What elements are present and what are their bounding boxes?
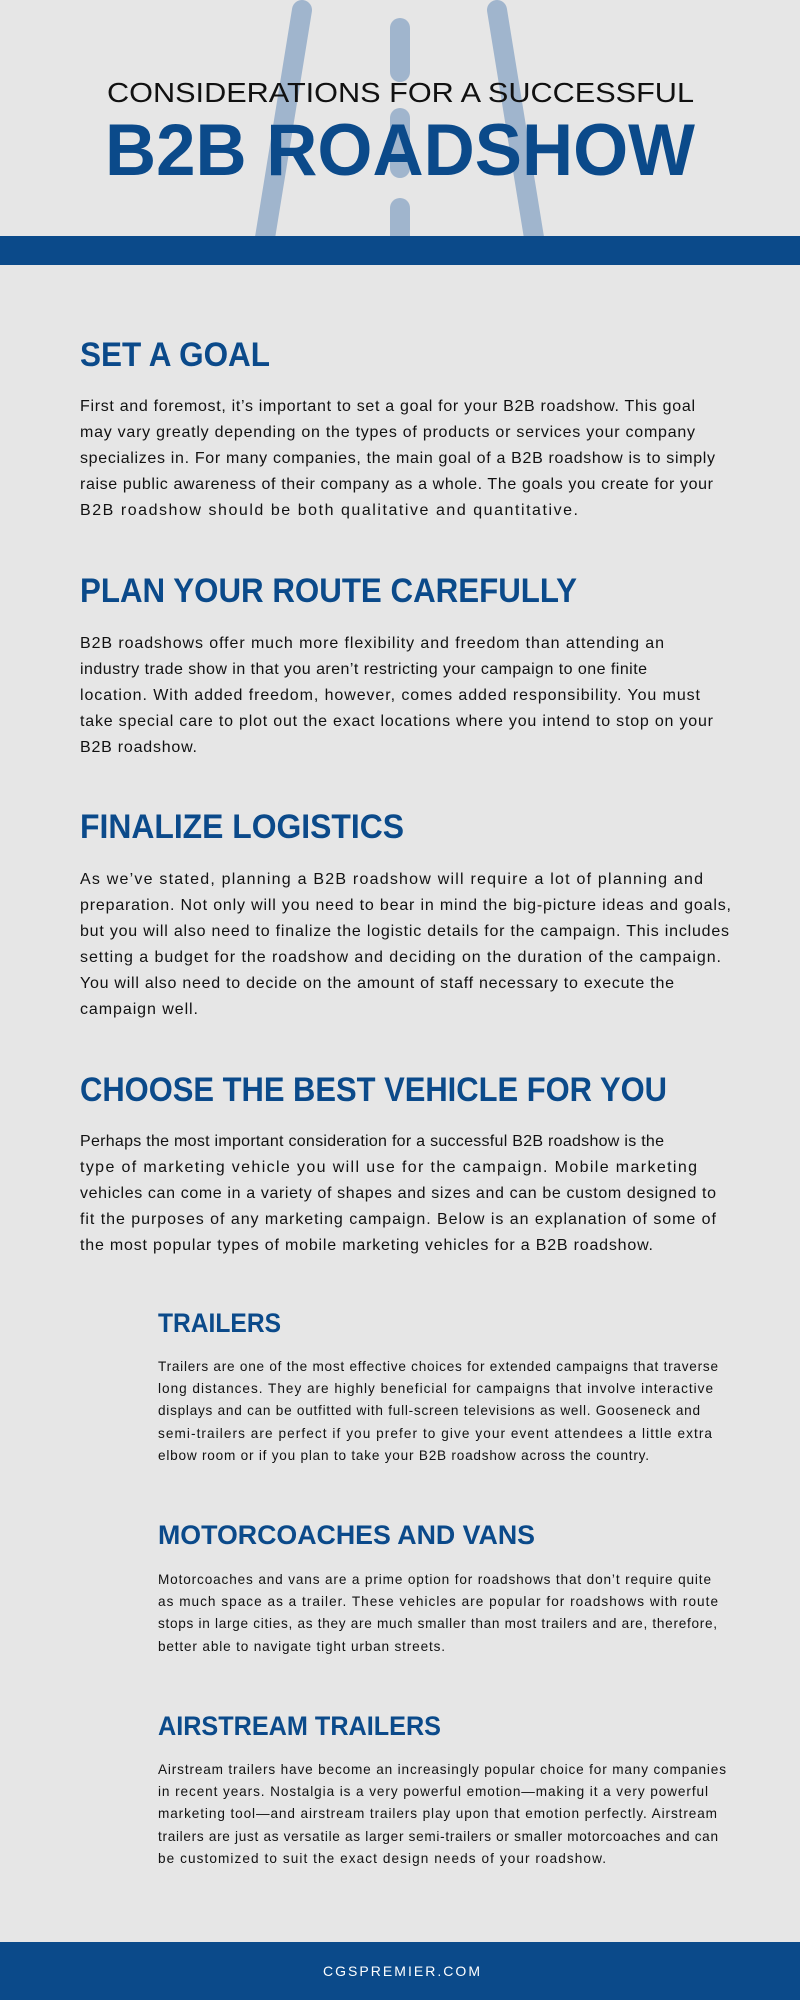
section: choose vehicle: CHOOSE THE BEST VEHICLE FOR YOU [80,1071,667,1109]
section: finalize logistics: but you will also need to finalize the logistic details for the campaign. This includes [80,923,729,940]
subsection: motorcoaches and vans: Motorcoaches and vans are a prime option for roadshows that don’t require quite [158,1572,711,1587]
section: choose vehicle: vehicles can come in a variety of shapes and sizes and can be custom designed to [80,1185,716,1202]
section: choose vehicle: fit the purposes of any marketing campaign. Below is an explanation of some of [80,1211,717,1228]
section: finalize logistics: As we’ve stated, planning a B2B roadshow will require a lot of planning and [80,871,703,888]
section: plan your route: B2B roadshow. [80,739,197,756]
title: B2B ROADSHOW [105,110,695,191]
section: finalize logistics: campaign well. [80,1001,198,1018]
subsection: motorcoaches and vans: as much space as a trailer. These vehicles are popular for roadshows with route [158,1594,718,1609]
section: plan your route [80,572,714,756]
section: set a goal: may vary greatly depending on the types of products or services your company [80,424,695,441]
section: finalize logistics [80,808,731,1018]
section: plan your route: location. With added freedom, however, comes added responsibility. You must [80,687,701,704]
subsection: trailers: Trailers are one of the most effective choices for extended campaigns that traverse [158,1359,718,1374]
subsection: airstream trailers: trailers are just as versatile as larger semi-trailers or smaller motorcoaches and can [158,1829,718,1844]
section: set a goal: B2B roadshow should be both qualitative and quantitative. [80,502,578,519]
section: finalize logistics: setting a budget for the roadshow and deciding on the duration of the campaign. [80,949,721,966]
subsection: trailers [158,1308,718,1463]
subsection: trailers: elbow room or if you plan to take your B2B roadshow across the country. [158,1448,649,1463]
subsection: trailers: long distances. They are highly beneficial for campaigns that involve interactive [158,1381,713,1396]
section: plan your route: B2B roadshows offer much more flexibility and freedom than attending an [80,635,664,652]
footer [0,1942,800,2000]
section: choose vehicle: the most popular types of mobile marketing vehicles for a B2B roadshow. [80,1237,653,1254]
subsection: airstream trailers: in recent years. Nostalgia is a very powerful emotion—making it a very powerful [158,1784,708,1799]
subsection: motorcoaches and vans: stops in large cities, as they are much smaller than most trailers and are, therefore, [158,1616,717,1631]
subsection: airstream trailers [158,1711,726,1866]
section: set a goal: raise public awareness of their company as a whole. The goals you create for your [80,476,714,493]
section: finalize logistics: FINALIZE LOGISTICS [80,808,404,846]
subsection: airstream trailers: Airstream trailers have become an increasingly popular choice for many companies [158,1762,726,1777]
section: choose vehicle [80,1071,717,1254]
subsection: trailers: TRAILERS [158,1308,281,1338]
section: plan your route: industry trade show in that you aren’t restricting your campaign to one finite [80,661,647,678]
section: set a goal: specializes in. For many companies, the main goal of a B2B roadshow is to simply [80,450,715,467]
section: set a goal [80,336,715,519]
section: plan your route: take special care to plot out the exact locations where you intend to stop on your [80,713,714,730]
subsection: motorcoaches and vans [158,1520,718,1654]
section: finalize logistics: You will also need to decide on the amount of staff necessary to execute the [80,975,674,992]
subsection: motorcoaches and vans: MOTORCOACHES AND VANS [158,1520,535,1550]
section: finalize logistics: preparation. Not only will you need to bear in mind the big-picture ideas and goals, [80,897,731,914]
section: choose vehicle: type of marketing vehicle you will use for the campaign. Mobile marketing [80,1159,697,1176]
footer: CGSPREMIER.COM [323,1963,480,1979]
subsection: airstream trailers: marketing tool—and airstream trailers play upon that emotion perfectly. Airstream [158,1806,717,1821]
section: plan your route: PLAN YOUR ROUTE CAREFULLY [80,572,577,610]
header band [0,236,800,265]
section: set a goal: First and foremost, it’s important to set a goal for your B2B roadshow. This goal [80,398,695,415]
section: set a goal: SET A GOAL [80,336,270,374]
section: choose vehicle: Perhaps the most important consideration for a successful B2B roadshow is the [80,1133,664,1150]
subsection: airstream trailers: AIRSTREAM TRAILERS [158,1711,441,1741]
title [105,77,695,191]
header: road illustration [263,10,536,250]
title: CONSIDERATIONS FOR A SUCCESSFUL [107,77,694,108]
subsection: motorcoaches and vans: better able to navigate tight urban streets. [158,1639,445,1654]
subsection: trailers: displays and can be outfitted with full-screen televisions as well. Gooseneck and [158,1403,700,1418]
subsection: trailers: semi-trailers are perfect if you prefer to give your event attendees a little extra [158,1426,712,1441]
subsection: airstream trailers: be customized to suit the exact design needs of your roadshow. [158,1851,606,1866]
